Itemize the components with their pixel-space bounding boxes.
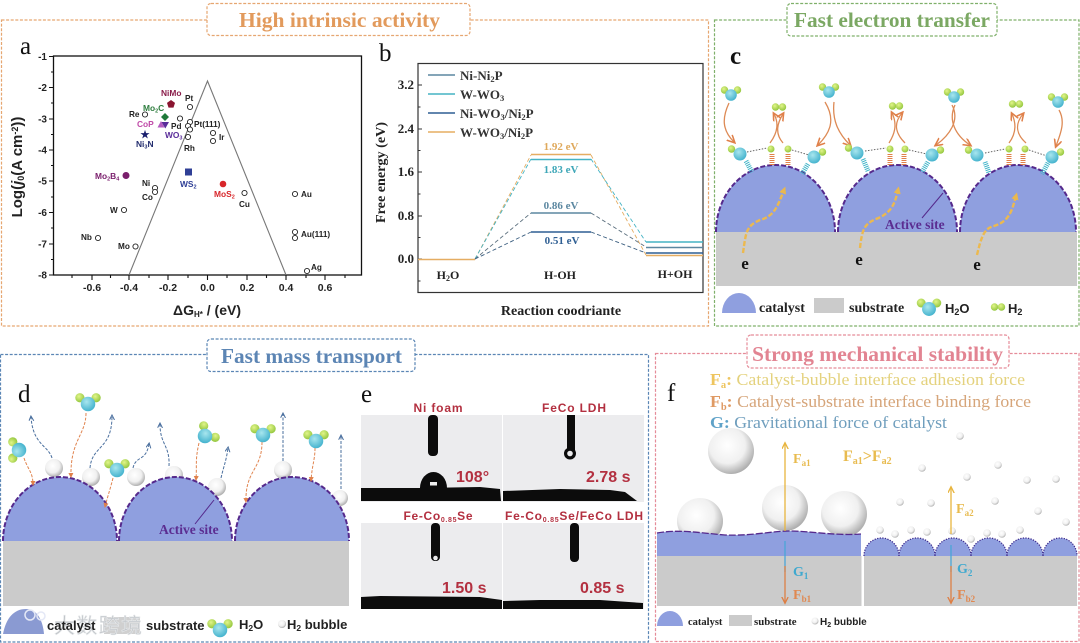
chart: volcano plot: -2 [38,83,47,94]
chart: volcano plot: 4 [116,176,120,182]
chart: volcano plot: -7 [38,240,47,250]
electron paths [743,190,1016,255]
legend: /Ni [504,106,522,121]
chart: volcano plot: -6 [38,208,47,219]
legend d: H [239,617,248,632]
heading: Strong mechanical stability [747,335,1009,368]
chart: volcano plot [9,52,362,319]
chart: volcano plot: Pt(111) [194,120,221,129]
label d: d [18,381,31,408]
photo panel: contact angle images [361,401,644,609]
label e: e [361,381,372,408]
legend: 2 [490,74,495,84]
chart: free energy diagram: O [450,268,459,282]
legend: P [526,106,534,121]
photo panel: contact angle images: Ni foam [414,401,462,415]
chart: free energy diagram: 1.6 [398,164,414,179]
photo panel: contact angle images: 0.85 s [580,580,625,597]
chart: free energy diagram: H-OH [544,268,577,282]
force labels: G [957,562,968,577]
reaction arrows [724,102,1062,146]
chart: volcano plot: -5 [38,176,47,188]
chart: volcano plot: MoS [214,189,232,199]
active site label [885,193,945,232]
force labels: a2 [965,508,974,518]
active site label: Active site [885,217,945,232]
force legend text: a [721,380,726,391]
catalyst domes [716,165,1076,232]
photo panel: contact angle images: FeCo LDH [542,401,606,415]
panel: fast electron transfer: e [855,250,863,269]
chart: volcano plot: -8 [38,270,47,282]
watermark: 大数跨境 [54,615,142,638]
large bubbles [677,428,867,544]
comparison text: >F [863,448,882,465]
chart: volcano plot: CoP [137,119,154,129]
legend d: catalyst [47,618,96,633]
chart: volcano plot: ΔG [173,302,194,318]
force legend text: Catalyst-bubble interface adhesion force [736,370,1012,389]
label c: c [730,43,741,70]
heading: High intrinsic activity: High intrinsic activity [239,8,441,32]
chart: volcano plot: 0 [16,176,26,181]
force labels: F [793,588,802,603]
chart: volcano plot: WO [165,130,179,140]
chart: volcano plot: / (eV) [203,302,241,318]
chart: volcano plot: )) [9,117,26,127]
chart: volcano plot: Re [129,110,140,119]
legend f: catalyst [688,617,723,628]
legend c: O [959,301,970,316]
legend d: 2 [296,623,301,633]
comparison text: a2 [882,456,892,467]
chart: volcano plot: 2 [107,176,110,182]
chart: free energy diagram: 1.92 eV [544,141,578,153]
panel: fast electron transfer [714,4,1079,326]
legend: 3 [500,93,504,103]
force labels: 1 [804,571,809,581]
chart: volcano plot: Au [301,190,312,199]
chart: free energy diagram: 2.4 [398,121,414,136]
photo panel: contact angle images: Se [457,509,473,523]
photo panel: contact angle images: Fe-Co [505,509,542,523]
force legend text: F [710,370,721,389]
bubble arrows [31,414,341,489]
flat catalyst [657,531,861,556]
photo panel: contact angle images: 108° [456,469,489,486]
panel: fast mass transport [0,339,648,642]
legend: W-WO [460,125,500,140]
chart: volcano plot: 2 [232,194,235,200]
chart: volcano plot: Mo [143,103,155,113]
force legend text: b [721,402,727,413]
legend: 2 [521,131,525,141]
label a: a [20,33,31,60]
chart: volcano plot: Co [142,193,153,202]
water molecules [8,393,329,477]
chart: volcano plot: 0.4 [279,282,293,294]
chart: volcano plot: Ni [142,179,150,188]
photo panel: contact angle images: 0.85 [441,517,457,524]
chart: free energy diagram: 1.83 eV [544,164,578,176]
legend f: substrate [754,616,797,628]
chart: volcano plot: 2 [194,184,197,190]
legend d: 2 [248,623,253,633]
force labels: a1 [802,458,811,468]
chart: volcano plot: Nb [81,233,92,242]
legend d: H [287,617,296,632]
legend: P [495,68,503,83]
legend f: bubble [831,617,867,628]
chart: volcano plot: (A cm [9,135,26,176]
molecules [721,83,1068,164]
chart: volcano plot: B [110,171,116,181]
chart: volcano plot: 0.2 [240,282,254,294]
chart: volcano plot: 0.6 [318,282,332,294]
legend f: 2 [827,622,831,629]
legend [428,68,534,141]
force legend text: G: Gravitational force of catalyst [710,413,947,432]
force labels [793,452,976,604]
chart: volcano plot: C [158,103,164,113]
panel: fast electron transfer: e [973,255,981,274]
force labels: 2 [968,568,973,578]
legend d: bubble [301,617,347,632]
heading: High intrinsic activity [207,4,470,36]
chart: volcano plot: -0.4 [120,282,138,294]
label b: b [379,40,392,67]
legend: Ni-WO [460,106,500,121]
chart: volcano plot: -3 [38,114,47,126]
legend d [47,617,347,637]
chart: volcano plot: Mo [118,242,130,251]
chart: free energy diagram: Reaction coodriante [501,304,621,319]
chart: volcano plot: Mo [95,171,107,181]
chart: free energy diagram: 0.8 [398,208,414,223]
small catalyst domes [864,538,1077,556]
photo panel: contact angle images: Fe-Co [404,509,440,523]
force legend text: : [727,392,733,411]
legend: /Ni [503,125,521,140]
force labels: F [793,452,802,467]
force legend text: Catalyst-substrate interface binding force [737,392,1018,411]
legend: 2 [521,112,526,122]
chart: free energy diagram: Free energy (eV) [373,122,388,223]
photo panel: contact angle images: 2.78 s [586,469,631,486]
chart: free energy diagram [373,64,703,319]
watermark [3,609,142,638]
force labels: G [793,565,804,580]
chart: volcano plot: W [110,206,118,215]
chart: volcano plot: Pd [171,122,181,131]
chart: free energy diagram: 0.51 eV [545,235,579,247]
force legend text: F [710,392,721,411]
active site label: Active site [159,522,219,537]
legend d: O [253,617,263,632]
photo panel: contact angle images: 1.50 s [442,580,487,597]
chart: volcano plot: 3 [144,144,147,150]
legend c: 2 [954,307,959,317]
panel: high intrinsic activity [2,4,708,326]
chart: free energy diagram: H+OH [658,267,693,281]
force labels: b1 [802,594,812,604]
chart: volcano plot: Rh [184,144,195,153]
chart: volcano plot: -1 [38,52,47,63]
active site label [159,500,219,537]
comparison text: a1 [853,456,863,467]
small bubbles [876,432,1070,543]
heading: Fast electron transfer: Fast electron transfer [794,8,990,32]
chart: volcano plot: -0.2 [159,282,177,294]
legend c: H [1008,301,1017,316]
legend: 3 [500,112,505,122]
chart: volcano plot: 2 [155,108,158,114]
water arrows [24,413,315,507]
chart: free energy diagram: H [437,268,446,282]
heading: Fast electron transfer [787,4,997,36]
catalyst domes [3,477,349,541]
chart: volcano plot: -0.6 [83,282,101,294]
panel: fast electron transfer: e [741,254,749,273]
legend: W-WO [460,87,500,102]
substrate [3,541,349,606]
legend c: 2 [1017,307,1022,317]
force labels: F [957,588,966,603]
chart: volcano plot: Ir [219,133,225,142]
force legend text: : [726,370,732,389]
substrate [716,232,1077,286]
chart: volcano plot: H* [194,310,204,319]
legend c: substrate [849,301,904,316]
chart: volcano plot: Au(111) [301,230,330,239]
chart: free energy diagram: 0.86 eV [544,200,578,212]
legend c: catalyst [759,301,805,316]
chart: volcano plot: 3 [179,136,182,142]
legend c [722,293,1022,317]
chart: volcano plot: WS [180,179,194,189]
legend d: substrate [146,618,205,633]
legend: Ni-Ni [460,68,490,83]
chart: volcano plot: 0.0 [200,282,215,294]
force labels: b2 [966,594,976,604]
legend: 3 [500,131,504,141]
chart: volcano plot: -2 [10,127,20,135]
legend f [657,611,867,629]
label f: f [667,380,676,407]
substrate [657,556,1077,606]
chart: free energy diagram: 2 [446,274,450,283]
chart: free energy diagram: 3.2 [398,77,414,92]
chart: volcano plot: NiMo [161,88,181,98]
chart: volcano plot: -4 [38,146,47,156]
heading: Fast mass transport: Fast mass transport [221,344,402,368]
chart: volcano plot: N [147,139,154,149]
adsorption bonds [746,154,1048,174]
force arrows [785,444,951,602]
photo panel: contact angle images: 0.85 [543,517,559,524]
chart: volcano plot: Cu [239,200,250,209]
legend c: H [945,301,954,316]
force legend text [710,370,1031,432]
bubbles [45,459,348,506]
legend f: H [820,617,827,628]
chart: volcano plot: Log(j [9,181,26,217]
chart: volcano plot: ★ [140,128,150,142]
panel: strong mechanical stability [656,335,1079,642]
chart: volcano plot: Ni [136,139,144,149]
legend: P [525,125,533,140]
comparison text: F [843,448,853,465]
chart: free energy diagram: 0.0 [398,251,414,266]
chart: volcano plot: Ag [311,263,322,272]
photo panel: contact angle images: Se/FeCo LDH [559,509,643,523]
chart: volcano plot: Pt [185,94,193,103]
heading: Strong mechanical stability: Strong mechanical stability [752,342,1004,366]
force labels: F [956,502,965,517]
heading: Fast mass transport [207,339,415,372]
